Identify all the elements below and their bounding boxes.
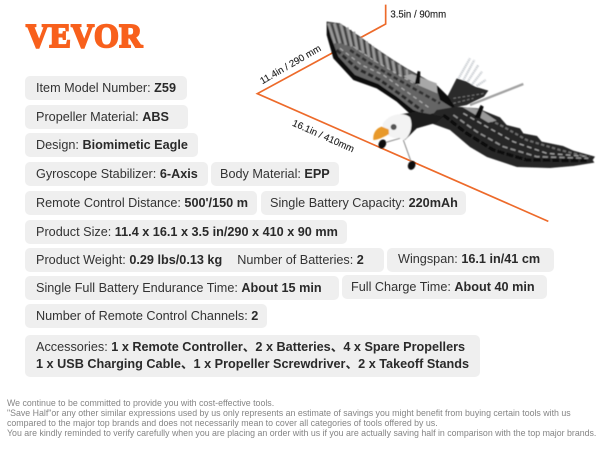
disclaimer text	[7, 398, 596, 438]
support rod	[470, 84, 523, 105]
dimension labels: 16.1in / 410mm	[290, 118, 356, 155]
spec: remote distance: Remote Control Distance: 500'/150 m	[36, 196, 248, 210]
left wing	[327, 22, 457, 120]
spec: body material: Body Material: EPP	[220, 167, 330, 181]
spec: accessories: 1 x USB Charging Cable、1 x Propeller Screwdriver、2 x Takeoff Stands	[36, 357, 469, 371]
spec: wingspan: Wingspan: 16.1 in/41 cm	[398, 252, 540, 266]
spec: model number	[25, 76, 187, 100]
right wing feather markings	[443, 115, 587, 161]
landing gear	[385, 138, 412, 163]
left wing grey feather field	[327, 23, 453, 115]
tail fan feathers	[457, 58, 486, 86]
dimension lines	[257, 5, 548, 221]
spec: product size	[25, 220, 347, 244]
left wing mottling	[337, 50, 423, 112]
spec: product size: Product Size: 11.4 x 16.1 x 3.5 in/290 x 410 x 90 mm	[36, 225, 338, 239]
spec: weight and batteries: Product Weight: 0.29 lbs/0.13 kg Number of Batteries: 2	[36, 253, 364, 267]
right wing	[427, 107, 595, 168]
wing servo pods	[415, 71, 420, 84]
spec: design	[25, 133, 198, 157]
body	[397, 112, 443, 140]
spec: endurance	[25, 276, 339, 300]
spec: battery capacity: Single Battery Capacity: 220mAh	[270, 196, 458, 210]
eagle illustration	[327, 22, 595, 171]
disclaimer text: compared to the major top brands and does not necessarily mean to cover all categories of tools offered by us.	[7, 418, 438, 428]
right wing light strip	[462, 107, 497, 123]
spec: model number: Item Model Number: Z59	[36, 81, 176, 95]
spec: body material	[211, 162, 339, 186]
spec: propeller material: Propeller Material: ABS	[36, 110, 169, 124]
spec: battery capacity	[261, 191, 466, 215]
logo: VEVOR: VEVOR	[26, 18, 143, 55]
spec: charge time: Full Charge Time: About 40 min	[351, 280, 535, 294]
spec: remote distance	[25, 191, 257, 215]
spec: accessories: Accessories: 1 x Remote Controller、2 x Batteries、4 x Spare Propellers	[36, 340, 465, 354]
disclaimer text: "Save Half"or any other similar expressions used by us only represents an estimate of savings you might benefit from buying certain tools with us	[7, 408, 571, 418]
disclaimer text: We continue to be committed to provide you with cost-effective tools.	[7, 398, 274, 408]
primary feathers	[328, 23, 408, 80]
dimension labels: 3.5in / 90mm	[390, 9, 446, 20]
spec: charge time	[342, 275, 547, 299]
tail	[447, 78, 488, 108]
spec: accessories	[25, 335, 480, 377]
spec: gyroscope: Gyroscope Stabilizer: 6-Axis	[36, 167, 198, 181]
head	[383, 114, 411, 139]
spec: design: Design: Biomimetic Eagle	[36, 138, 188, 152]
spec: endurance: Single Full Battery Endurance Time: About 15 min	[36, 281, 322, 295]
dimension labels	[258, 9, 446, 155]
beak	[373, 127, 389, 140]
disclaimer text: You are kindly reminded to verify carefully when you are placing an order with us if you are actually saving half in comparison with the top major brands.	[7, 428, 596, 438]
spec: weight and batteries	[25, 248, 384, 272]
spec: propeller material	[25, 105, 188, 129]
spec: channels: Number of Remote Control Channels: 2	[36, 309, 258, 323]
dimension labels: 11.4in / 290 mm	[258, 43, 323, 87]
spec: gyroscope	[25, 162, 208, 186]
spec: wingspan	[387, 248, 554, 272]
left wing light strip	[403, 74, 437, 93]
spec: channels	[25, 304, 267, 328]
